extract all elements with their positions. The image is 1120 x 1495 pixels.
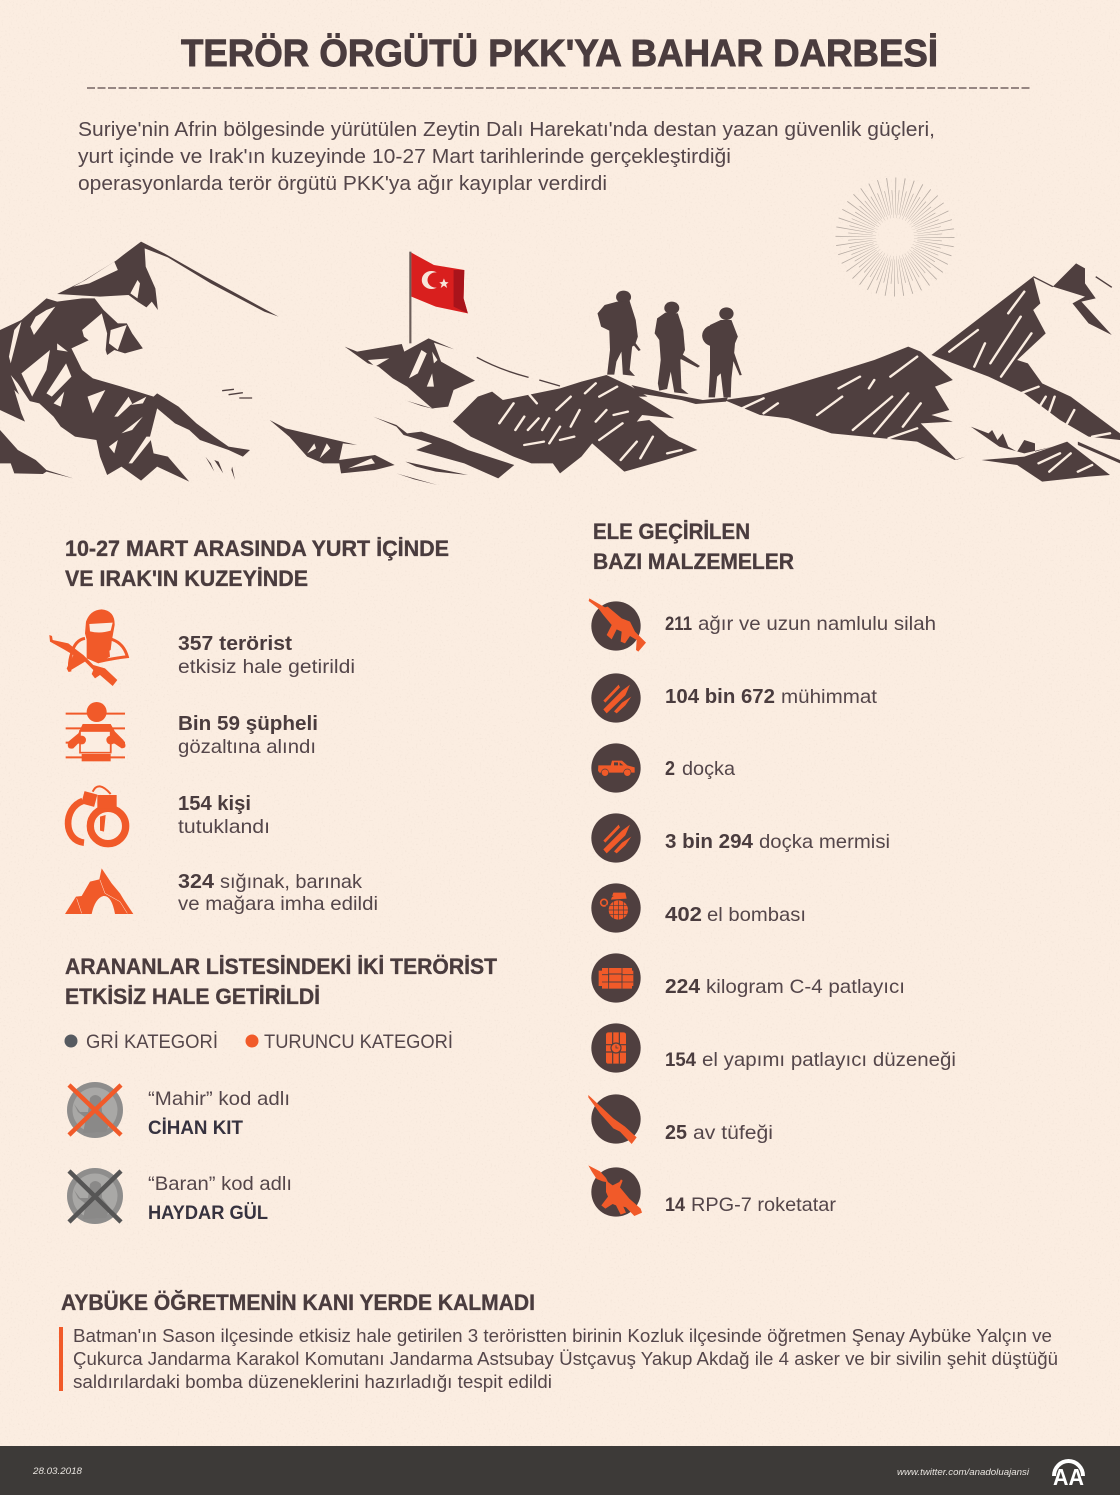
text: 211 weapons: 211 [665,614,692,635]
intro text [78,119,935,195]
icon: ammunition [591,673,641,723]
icon: Cihan Kıt crossed out [67,1082,123,1138]
text: 154 arrested: 154 kişi [178,793,251,815]
text: note body: Çukurca Jandarma Karakol Komutanı Jandarma Astsubay Üstçavuş Yakup Akdağ ile 4 asker ve bir sivilin şehit düştüğü [73,1349,1058,1369]
illustration: soldiers [597,291,742,397]
text: 154 IEDs: 154 [665,1050,696,1071]
icon: Haydar Gül crossed out [67,1168,123,1224]
panel: wanted list [64,954,498,1224]
icon: detainee [66,702,125,761]
text: 104672 ammunition [665,686,878,708]
text: 2 dushka: 2 [665,758,675,780]
panel: seized materials [588,519,956,1217]
heading: seized materials: ELE GEÇİRİLEN [593,519,750,544]
icon: sun rays [854,196,936,278]
intro text: Suriye'nin Afrin bölgesinde yürütülen Zeytin Dalı Harekatı'nda destan yazan güvenlik güçleri, [78,119,935,141]
icon: cave [65,868,133,914]
title: TERÖR ÖRGÜTÜ PKK'YA BAHAR DARBESİ [181,32,938,75]
text: 357 terrorists: etkisiz hale getirildi [178,656,355,678]
icon: masked terrorist [49,609,127,686]
text: 1059 suspects [178,713,318,758]
text: note body: Batman'ın Sason ilçesinde etkisiz hale getirilen 3 teröristten birinin Kozluk ilçesinde öğretmen Şenay Aybüke Yalçın ve [73,1326,1052,1346]
text: 402 grenades: el bombası [707,904,806,926]
illustration: centre mountains [270,338,560,485]
legend: categories: TURUNCU KATEGORİ [264,1032,453,1053]
text: 25 shotguns [665,1122,773,1144]
icon: dushka rounds [591,813,641,863]
legend: categories [64,1032,453,1053]
text: 324 shelters: 324 [178,871,215,893]
text: 154 IEDs: el yapımı patlayıcı düzeneği [702,1049,956,1071]
text: 154 arrested [178,793,270,838]
text: 402 grenades: 402 [665,904,702,926]
icon: shotgun [588,1094,641,1144]
icon: truck [591,743,641,793]
heading: wanted terrorists: ETKİSİZ HALE GETİRİLDİ [65,984,320,1009]
illustration: left mountains [0,242,279,482]
text: 104672 ammunition: mühimmat [781,686,878,708]
icon: C-4 explosive [591,953,641,1003]
icon: handcuffs [68,786,126,844]
heading: seized materials: BAZI MALZEMELER [593,549,794,574]
icon: grenade [591,883,641,933]
date: 28.03.2018 [32,1466,83,1477]
text: note body [73,1326,1058,1392]
text: 402 grenades [665,904,806,926]
icon: RPG launcher [588,1165,642,1217]
text: 357 terrorists: 357 terörist [178,633,292,655]
panel: Aybüke teacher note [59,1290,1058,1392]
heading: wanted terrorists: ARANANLAR LİSTESİNDEKİ İKİ TERÖRİST [65,954,498,979]
text: Cihan Kıt: “Mahir” kod adlı [148,1088,290,1110]
text: 25 shotguns: 25 [665,1122,687,1144]
heading: dates: VE IRAK'IN KUZEYİNDE [65,566,308,591]
icon: Turkish flag [409,252,468,343]
text: 3294 rounds [665,831,890,853]
heading: dates: 10-27 MART ARASINDA YURT İÇİNDE [65,536,449,561]
text: 25 shotguns: av tüfeği [693,1122,773,1144]
source url: www.twitter.com/anadoluajansi [897,1467,1030,1478]
heading: wanted terrorists [65,954,498,1009]
text: 1059 suspects: Bin 59 şüpheli [178,713,318,735]
heading: Aybüke teacher: AYBÜKE ÖĞRETMENİN KANI YERDE KALMADI [61,1290,535,1315]
text: 211 weapons: ağır ve uzun namlulu silah [698,613,936,635]
icon: assault rifle [589,598,646,652]
soldier 2 [655,302,700,394]
text: note body: saldırılardaki bomba düzeneklerini hazırladığı tespit edildi [73,1372,552,1392]
text: 14 RPG-7: 14 [665,1195,685,1216]
heading: dates [65,536,449,591]
text: Haydar Gül [148,1173,292,1224]
soldier 3 [702,307,742,397]
icon: improvised explosive [591,1023,641,1073]
intro text: yurt içinde ve Irak'ın kuzeyinde 10-27 Mart tarihlerinde gerçekleştirdiği [78,146,731,168]
text: Haydar Gül: HAYDAR GÜL [148,1203,268,1224]
text: 224 kg C-4: 224 [665,976,701,998]
text: 357 terrorists [178,633,355,678]
text: 3294 rounds: 3 bin 294 [665,831,754,853]
text: 14 RPG-7: RPG-7 roketatar [691,1194,837,1216]
text: Cihan Kıt: CİHAN KIT [148,1118,243,1139]
text: 3294 rounds: doçka mermisi [759,831,890,853]
text: 104672 ammunition: 104 bin 672 [665,686,775,708]
logo: Anadolu Agency: AA [1053,1464,1084,1490]
text: 324 shelters [178,871,378,915]
panel: operations statistics [49,536,449,915]
text: Cihan Kıt [148,1088,290,1139]
text: 154 arrested: tutuklandı [178,816,270,838]
text: Haydar Gül: “Baran” kod adlı [148,1173,292,1195]
legend: categories: GRİ KATEGORİ [86,1032,218,1053]
text: 1059 suspects: gözaltına alındı [178,736,316,758]
footer bar [0,1446,1120,1495]
heading: seized materials [593,519,794,574]
text: 2 dushka: doçka [682,758,735,780]
intro text: operasyonlarda terör örgütü PKK'ya ağır kayıplar verdirdi [78,173,607,195]
text: 324 shelters: ve mağara imha edildi [178,893,378,915]
text: 224 kg C-4: kilogram C-4 patlayıcı [706,976,905,998]
illustration: right mountains [724,263,1120,482]
soldier 1 [597,291,641,376]
text: 324 shelters: sığınak, barınak [220,871,362,893]
